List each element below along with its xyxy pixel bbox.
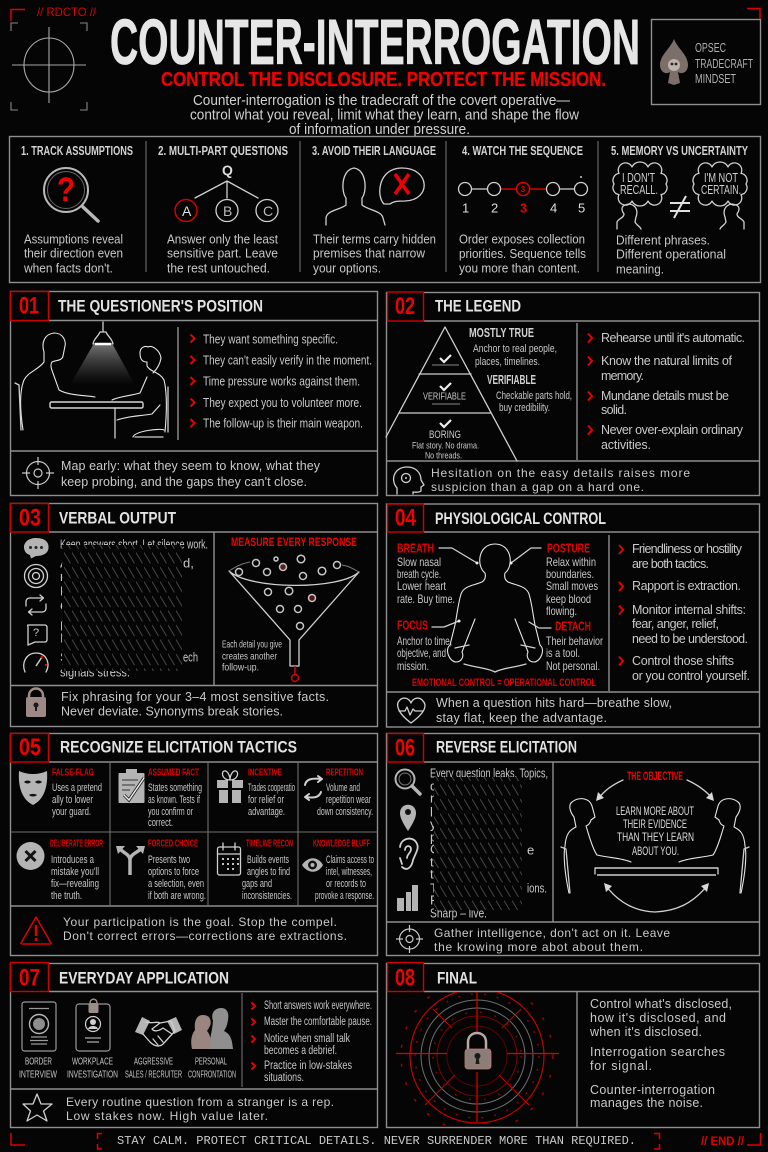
note: detach <box>546 618 603 673</box>
bullet list: They want something specific. <box>203 332 338 346</box>
number badge 05 <box>10 734 48 762</box>
intro text: control what you reveal, limit what they learn, and shape the flow <box>190 108 579 124</box>
callout: participation warning <box>21 915 347 944</box>
rule 4: watch the sequence <box>458 144 588 276</box>
redacted text block: lI <box>430 804 436 820</box>
redacted text block: S <box>60 650 69 664</box>
closing statements: for signal. <box>590 1059 652 1073</box>
redacted text block: C <box>60 598 69 614</box>
funnel diagram: creates another <box>222 652 278 662</box>
heading: EVERYDAY APPLICATION <box>59 968 229 988</box>
diagram: the objective: THAN THEY LEARN <box>617 830 694 844</box>
legend notes: VERIFIABLE <box>487 373 536 387</box>
rule 2: multi-part questions: Answer only the least <box>167 232 278 246</box>
tactic: repetition <box>305 768 373 818</box>
rule 2: multi-part questions: A <box>182 203 192 219</box>
tactic: deliberate error: Introduces a <box>51 854 95 866</box>
tag: end: // END // <box>701 1134 745 1148</box>
callout: hesitation: suspicion than a gap on a hard one. <box>431 480 644 494</box>
legend notes: buy credibility. <box>499 402 550 414</box>
tactic: timeline recon: TIMELINE RECON <box>246 838 293 850</box>
rule 4: watch the sequence: priorities. Sequence tells <box>459 246 586 261</box>
rule 4: watch the sequence: 1 <box>462 200 469 216</box>
bullet list: Never over-explain ordinary <box>601 423 744 437</box>
rule 4: watch the sequence: 3 <box>520 184 526 194</box>
note: breath: BREATH <box>397 540 434 556</box>
bullet list: or you control yourself. <box>632 669 750 683</box>
heading: THE LEGEND <box>435 296 521 316</box>
note: focus: FOCUS <box>397 618 428 632</box>
tactic: knowledge bluff: intel, witnesses, <box>326 866 372 878</box>
number badge 01 <box>10 292 48 320</box>
tactic: deliberate error: mistake you'll <box>51 866 99 878</box>
panel 01: the questioner's position <box>10 292 378 496</box>
scenario: personal confrontation <box>188 1008 236 1080</box>
rule 4: watch the sequence: 5 <box>578 200 585 216</box>
rule 4: watch the sequence: Order exposes collection <box>459 232 585 246</box>
tactic: assumed fact <box>118 768 202 829</box>
bullet list: Rapport is extraction. <box>632 579 741 593</box>
bullet list: Control those shifts <box>632 654 734 668</box>
equation: emotional control: EMOTIONAL CONTROL = OPERATIONAL CONTROL <box>412 677 596 689</box>
legend notes <box>469 326 572 414</box>
rule 5: memory vs uncertainty: I DON'T <box>622 171 655 185</box>
rule 1: track assumptions: their direction even <box>24 246 123 260</box>
number badge 08: 08 <box>395 964 415 992</box>
note: breath: Lower heart <box>397 579 447 593</box>
tactic: forced choice <box>116 838 206 902</box>
tactic: assumed fact: you confirm or <box>148 806 193 818</box>
intro text: Counter-interrogation is the tradecraft of the covert operative— <box>193 93 570 109</box>
icon column: ? <box>33 627 39 639</box>
legend notes: Anchor to real people, <box>473 343 557 355</box>
funnel diagram: follow-up. <box>222 662 259 674</box>
rule 2: multi-part questions: Q <box>222 162 233 178</box>
panel 04: physiological control <box>386 504 760 727</box>
panel 05: recognize elicitation tactics <box>10 734 378 956</box>
bullet list: Mundane details must be <box>601 389 729 403</box>
pyramid: Flat story. No drama. <box>412 440 479 452</box>
bullet list: Short answers work everywhere. <box>264 1000 372 1012</box>
note: detach: Not personal. <box>546 659 600 673</box>
tactic: repetition: down consistency. <box>317 806 373 818</box>
heading: PHYSIOLOGICAL CONTROL <box>435 509 606 528</box>
rule 1: track assumptions <box>21 144 133 276</box>
tactic: knowledge bluff: Claims access to <box>326 854 374 866</box>
header <box>11 5 760 138</box>
redacted text block: e <box>527 842 534 858</box>
note: breath <box>397 540 455 606</box>
badge: opsec tradecraft mindset <box>652 20 760 104</box>
callout: fix phrasing: Fix phrasing for your 3–4 most sensitive facts. <box>61 690 329 704</box>
note: posture: keep blood <box>546 592 591 606</box>
rule 5: memory vs uncertainty: Different operational <box>616 246 726 262</box>
rule 2: multi-part questions: B <box>223 203 232 219</box>
bullet list: They expect you to volunteer more. <box>203 395 362 410</box>
note: posture: Small moves <box>546 579 598 593</box>
rule 5: memory vs uncertainty <box>611 144 748 276</box>
rule 3: avoid their language: 3. AVOID THEIR LANGUAGE <box>312 144 436 158</box>
redacted text block <box>430 766 548 920</box>
callout: hesitation: Hesitation on the easy details raises more <box>431 466 690 480</box>
callout: gather intelligence <box>396 925 670 954</box>
note: posture <box>546 540 598 618</box>
tactic: forced choice: if both are wrong. <box>148 890 206 902</box>
bullet list: Rehearse until it's automatic. <box>601 331 745 345</box>
rule 5: memory vs uncertainty: Different phrases. <box>616 232 710 248</box>
pyramid: BORING <box>429 429 461 441</box>
tactic: deliberate error <box>16 838 103 902</box>
bullet list: are both tactics. <box>632 557 709 571</box>
bullet list <box>252 1000 372 1084</box>
bracket: right of slogan <box>654 1134 660 1149</box>
tactic: deliberate error: DELIBERATE ERROR <box>50 838 103 850</box>
bullet list: activities. <box>601 438 651 452</box>
tactic: timeline recon: Builds events <box>247 854 289 866</box>
panel 02: the legend <box>386 292 760 496</box>
heading: FINAL <box>437 968 477 988</box>
redacted text block: y <box>430 816 437 832</box>
redacted text block: ions. <box>527 880 547 896</box>
redacted text block: p <box>430 830 437 844</box>
redacted text block: A <box>60 556 69 570</box>
tactic: false-flag: FALSE-FLAG <box>52 768 94 778</box>
closing statements: Counter-interrogation <box>590 1083 715 1097</box>
rule 4: watch the sequence: 2 <box>491 200 498 216</box>
closing statements: manages the noise. <box>590 1096 703 1110</box>
note: detach: is a tool. <box>546 646 580 660</box>
rule 1: track assumptions: ? <box>57 171 75 209</box>
corner bracket: bottom right <box>747 1133 760 1145</box>
redacted text block: d, <box>183 556 194 570</box>
number badge 06: 06 <box>395 734 415 762</box>
rule 5: memory vs uncertainty: I'M NOT <box>704 171 738 185</box>
diagram: the objective: THEIR EVIDENCE <box>623 817 687 831</box>
tactic: incentive: Trades cooperatio <box>248 782 295 794</box>
rule 2: multi-part questions <box>158 144 288 276</box>
number badge 08 <box>388 962 424 992</box>
legend notes: places, timelines. <box>475 356 540 368</box>
note: focus <box>397 618 452 673</box>
note: detach: Their behavior <box>546 634 603 648</box>
scenario: workplace investigation <box>67 999 118 1080</box>
note: posture: POSTURE <box>547 540 590 556</box>
diagram: the objective: ABOUT YOU. <box>632 844 679 858</box>
scenario: workplace investigation: WORKPLACE <box>72 1056 113 1068</box>
scenario: personal confrontation: CONFRONTATION <box>188 1070 236 1080</box>
redacted text block <box>60 536 208 680</box>
redacted text block: r <box>60 569 65 584</box>
rule 1: track assumptions: Assumptions reveal <box>24 232 123 246</box>
bullet list <box>190 332 372 430</box>
rule 4: watch the sequence: you more than content. <box>459 260 580 276</box>
note: posture: boundaries. <box>546 567 594 581</box>
rule 4: watch the sequence: 3 <box>520 200 527 216</box>
scenario: personal confrontation: PERSONAL <box>195 1056 227 1068</box>
rule 5: memory vs uncertainty: CERTAIN. <box>701 183 741 197</box>
funnel diagram <box>222 537 359 682</box>
pyramid <box>386 327 517 462</box>
bullet list: solid. <box>601 403 627 417</box>
bullet list: Notice when small talk <box>264 1033 350 1045</box>
redacted text block: Sharp – live. <box>430 906 487 920</box>
bullet list: Friendliness or hostility <box>632 542 743 556</box>
number badge 01: 01 <box>19 292 39 320</box>
panel 07: everyday application <box>10 962 378 1128</box>
tactic: assumed fact: States something <box>148 782 202 794</box>
note: focus: mission. <box>397 659 429 673</box>
redacted text block: d <box>430 778 437 794</box>
scenario: aggressive sales / recruiter <box>125 1017 182 1080</box>
tactic: deliberate error: the truth. <box>51 890 82 902</box>
radar with padlock <box>396 992 559 1126</box>
rule 5: memory vs uncertainty: RECALL. <box>620 183 658 197</box>
redacted text block: t <box>430 866 434 882</box>
legend notes: MOSTLY TRUE <box>469 326 534 340</box>
tactic: false-flag <box>19 768 102 818</box>
panel 03: verbal output <box>10 504 378 726</box>
bullet list <box>588 331 745 452</box>
redacted text block: L <box>60 584 67 598</box>
scenario: border interview: BORDER <box>25 1056 52 1068</box>
number badge 02 <box>388 292 424 321</box>
tactic: false-flag: ally to lower <box>52 794 93 806</box>
bullet list: Know the natural limits of <box>601 354 733 368</box>
redacted text block: Keep answers short. Let silence work. <box>60 536 208 552</box>
bullet list: situations. <box>264 1072 304 1084</box>
tactic: timeline recon: angles to find <box>247 866 290 878</box>
bullet list: becomes a debrief. <box>264 1045 337 1057</box>
rule 2: multi-part questions: sensitive part. Leave <box>167 246 278 260</box>
note: focus: Anchor to time, <box>397 634 452 648</box>
number badge 03: 03 <box>19 504 41 532</box>
bullet list: Practice in low-stakes <box>264 1060 352 1072</box>
rule 4: watch the sequence: 4 <box>550 200 557 216</box>
number badge 02: 02 <box>395 293 415 320</box>
tactic: repetition: Volume and <box>326 782 360 794</box>
bullet list: Time pressure works against them. <box>203 374 360 388</box>
rule 5: memory vs uncertainty: meaning. <box>616 262 664 276</box>
note: focus: objective, and <box>397 646 446 660</box>
tactic: forced choice: Presents two <box>148 854 190 866</box>
callout: fix phrasing: Never deviate. Synonyms break stories. <box>61 704 283 718</box>
tactic: knowledge bluff <box>302 838 374 902</box>
icon: reticle <box>11 23 87 110</box>
tactic: assumed fact: correct. <box>148 817 173 829</box>
redacted text block: D <box>60 618 69 634</box>
redacted text block: I <box>60 630 64 646</box>
tactic: timeline recon: gaps and <box>242 878 272 890</box>
figure: seated meditating body <box>432 544 551 672</box>
tactic: false-flag: your guard. <box>52 806 91 818</box>
tactic: incentive <box>217 768 295 818</box>
redacted text block: T <box>430 880 438 896</box>
pyramid: VERIFIABLE <box>423 392 466 402</box>
number badge 07 <box>10 962 48 992</box>
redacted text block: C <box>430 842 439 856</box>
panel 08: final <box>386 962 760 1132</box>
tactic: incentive: for relief or <box>248 794 284 806</box>
funnel diagram: Each detail you give <box>222 640 282 650</box>
panel: five quick rules <box>10 136 760 282</box>
tactic: assumed fact: ASSUMED FACT <box>148 768 199 778</box>
footer strip <box>11 1133 760 1149</box>
note: detach: DETACH <box>555 618 591 634</box>
tactic: timeline recon <box>218 838 293 902</box>
corner bracket: top right <box>747 8 760 19</box>
callout: every question is a rep: Every routine question from a stranger is a rep. <box>66 1095 334 1109</box>
panel 06: reverse elicitation <box>386 734 760 956</box>
tactic: knowledge bluff: or records to <box>326 878 366 890</box>
rule 3: avoid their language: your options. <box>313 260 381 276</box>
callout: participation warning: Your participation is the goal. Stop the compel. <box>63 915 337 929</box>
tactic: incentive: INCENTIVE <box>248 768 282 778</box>
intro text: of information under pressure. <box>289 122 470 138</box>
corner bracket: top left <box>11 10 25 21</box>
bullet list: fear, anger, relief, <box>632 617 719 631</box>
redacted text block: t <box>430 854 434 870</box>
callout: gather intelligence: Gather intelligence, don't act on it. Leave <box>434 926 670 940</box>
heading: REVERSE ELICITATION <box>436 738 577 756</box>
tactic: knowledge bluff: KNOWLEDGE BLUFF <box>313 838 370 850</box>
redacted text block: ech <box>183 650 198 664</box>
callout: every question is a rep <box>23 1094 334 1123</box>
tactic: forced choice: FORCED CHOICE <box>148 838 198 850</box>
intro text <box>190 93 579 138</box>
bullet list: memory. <box>601 369 644 383</box>
tactic: false-flag: Uses a pretend <box>52 782 102 794</box>
badge: opsec tradecraft mindset: MINDSET <box>695 72 736 86</box>
tactic: forced choice: options to force <box>148 866 199 878</box>
scenario: aggressive sales / recruiter: SALES / RECRUITER <box>125 1070 182 1080</box>
rule 1: track assumptions: when facts don't. <box>23 260 113 276</box>
callout: breathe slow: stay flat, keep the advantage. <box>436 711 607 725</box>
callout: hesitation <box>394 466 690 494</box>
redacted text block: Every question leaks. Topics, <box>430 766 548 780</box>
redacted text block: F <box>430 892 438 908</box>
tactic: assumed fact: as known. Tests if <box>148 794 201 806</box>
note: breath: rate. Buy time. <box>397 592 455 606</box>
rule 2: multi-part questions: C <box>263 203 273 219</box>
closing statements: Interrogation searches <box>590 1045 725 1059</box>
tag: redacted code: // RDCTO // <box>37 5 97 19</box>
pyramid: No threads. <box>425 450 462 462</box>
scenario: border interview: INTERVIEW <box>19 1070 57 1080</box>
bullet list: The follow-up is their main weapon. <box>203 416 363 430</box>
tactic: forced choice: a selection, even <box>148 878 204 890</box>
number badge 04: 04 <box>395 504 417 532</box>
bullet list: Monitor internal shifts: <box>632 603 746 617</box>
tactic: knowledge bluff: provoke a response. <box>315 890 374 902</box>
heading: THE QUESTIONER'S POSITION <box>58 296 263 316</box>
bullet list: Master the comfortable pause. <box>264 1016 372 1028</box>
callout: fix phrasing <box>26 688 329 718</box>
number badge 03 <box>10 504 48 532</box>
tactic: incentive: advantage. <box>248 806 285 818</box>
bullet list <box>619 542 750 683</box>
badge: opsec tradecraft mindset: OPSEC <box>695 41 726 55</box>
callout: breathe slow <box>398 696 672 725</box>
callout: map early <box>22 457 321 489</box>
callout: gather intelligence: the krowing more abot about them. <box>434 940 643 954</box>
callout: breathe slow: When a question hits hard—breathe slow, <box>436 696 672 710</box>
legend notes: Checkable parts hold, <box>496 390 572 402</box>
callout: participation warning: Don't correct errors—corrections are extractions. <box>63 929 347 943</box>
note: posture: flowing. <box>546 604 577 618</box>
bullet list: They can't easily verify in the moment. <box>203 352 372 368</box>
illustration: interrogation table under lamp <box>15 322 168 438</box>
redacted text block: n <box>430 790 437 806</box>
icon column <box>24 538 49 672</box>
rule 2: multi-part questions: the rest untouched. <box>167 260 270 276</box>
rule 3: avoid their language: Their terms carry hidden <box>313 232 436 246</box>
rule 2: multi-part questions: 2. MULTI-PART QUESTIONS <box>158 144 288 158</box>
slogan: STAY CALM. PROTECT CRITICAL DETAILS. NEVER SURRENDER MORE THAN REQUIRED. <box>117 1134 636 1148</box>
rule 3: avoid their language: premises that narrow <box>313 246 426 260</box>
bracket: left of slogan <box>98 1134 102 1149</box>
heading: RECOGNIZE ELICITATION TACTICS <box>60 738 297 756</box>
callout: map early: keep probing, and the gaps they can't close. <box>61 475 307 489</box>
bullet list: need to be understood. <box>632 632 748 646</box>
note: breath: Slow nasal <box>397 555 441 569</box>
heading: VERBAL OUTPUT <box>59 508 176 528</box>
diagram: the objective <box>561 771 749 912</box>
tactic: timeline recon: inconsistencies. <box>242 890 292 902</box>
rule 3: avoid their language <box>312 144 436 276</box>
funnel diagram: MEASURE EVERY RESPONSE <box>231 537 357 549</box>
callout: map early: Map early: what they seem to know, what they <box>61 459 321 473</box>
scenario: workplace investigation: INVESTIGATION <box>67 1070 118 1080</box>
icon column <box>396 770 420 911</box>
diagram: the objective: LEARN MORE ABOUT <box>616 804 694 818</box>
redacted text block: signals stress. <box>60 664 130 680</box>
number badge 07: 07 <box>19 964 40 992</box>
closing statements: how it's disclosed, and <box>590 1011 726 1025</box>
rule 1: track assumptions: 1. TRACK ASSUMPTIONS <box>21 144 133 158</box>
closing statements: when it's disclosed. <box>589 1025 702 1039</box>
closing statements <box>589 997 732 1110</box>
rule 4: watch the sequence: 4. WATCH THE SEQUENCE <box>462 144 583 158</box>
tactic: repetition: repetition wear <box>326 794 371 806</box>
tactic: deliberate error: fix—revealing <box>51 878 99 890</box>
subtitle: CONTROL THE DISCLOSURE. PROTECT THE MISSION. <box>161 69 606 91</box>
number badge 05: 05 <box>19 734 41 761</box>
note: breath: breath cycle. <box>397 567 441 581</box>
note: posture: Relax within <box>546 555 596 569</box>
diagram: the objective: THE OBJECTIVE <box>627 771 683 783</box>
tactic: repetition: REPETITION <box>326 768 363 778</box>
corner bracket: bottom left <box>11 1133 25 1145</box>
closing statements: Control what's disclosed, <box>590 997 732 1011</box>
scenario: aggressive sales / recruiter: AGGRESSIVE <box>134 1056 173 1068</box>
scenario: border interview <box>19 1002 57 1080</box>
callout: every question is a rep: Low stakes now. High value later. <box>66 1109 268 1123</box>
